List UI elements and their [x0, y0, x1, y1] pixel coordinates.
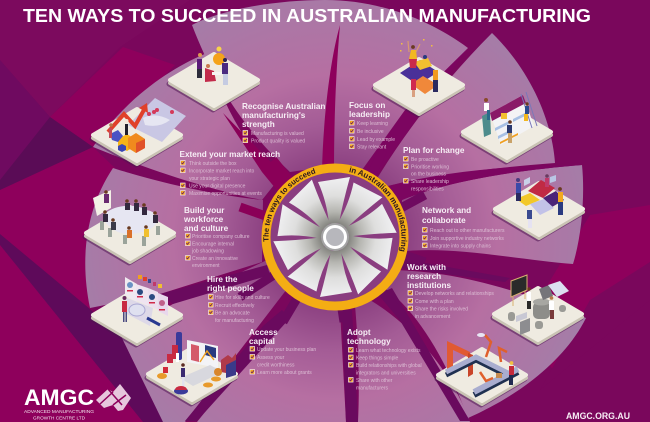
panel: plan illustration [462, 92, 551, 162]
central turbine with ring: in Australian manufacturing [349, 166, 408, 252]
text: recognise: Product quality is valued [251, 138, 305, 144]
panel: network illustration [494, 174, 583, 239]
text: work with research: research [407, 272, 441, 281]
text: focus: leadership [349, 110, 390, 119]
text: work with research: institutions [407, 281, 452, 290]
text: adopt: Adopt [347, 328, 371, 337]
text: plan: Be proactive [411, 157, 439, 163]
text: build: environment [192, 263, 220, 269]
text: work with research: Work with [407, 263, 446, 272]
text: focus: Stay relevant [357, 144, 387, 150]
panel: access illustration [147, 332, 236, 404]
text: network: collaborate [422, 216, 466, 225]
text: adopt [347, 328, 422, 391]
text: plan: Share leadership [411, 179, 449, 185]
text: build: job shadowing [191, 248, 224, 254]
panel: adopt illustration [437, 333, 526, 405]
text: plan: Plan for change [403, 146, 465, 155]
panel: hire illustration [92, 275, 181, 345]
text: work with research: in advancement [415, 314, 451, 320]
logo: AMGC: GROWTH CENTRE LTD [33, 416, 86, 420]
central turbine with ring [262, 164, 408, 310]
text: access: Access [249, 328, 278, 337]
text: work with research [407, 263, 494, 320]
text: network: Join supportive industry networks [430, 236, 504, 242]
text: plan: Prioritise working [411, 164, 449, 170]
text: work with research: Share the risks involved [415, 306, 468, 312]
text: build: Prioritise company culture [192, 234, 250, 240]
text: extend: Think outside the box [189, 161, 237, 167]
text: focus: Lead by example [357, 137, 395, 143]
text: access: credit worthiness [257, 362, 295, 368]
text: adopt: Keep things simple [356, 355, 398, 361]
panel: recognise illustration [169, 46, 258, 110]
text: build: Build your [184, 206, 225, 215]
logo: AMGC: AMGC [24, 385, 94, 410]
text: plan [403, 146, 465, 192]
text: extend: Extend your market reach [180, 150, 280, 159]
text: focus: Keep learning [357, 121, 388, 127]
logo: AMGC: ADVANCED MANUFACTURING [24, 409, 94, 414]
text: extend: Maximise opportunities at events [189, 191, 262, 197]
text: focus [349, 101, 395, 150]
text: work with research: Develop networks and relationships [415, 291, 494, 297]
text: adopt: Share with other [356, 378, 393, 384]
central turbine with ring: The ten ways to succeed [263, 168, 316, 242]
text: extend: Use your digital presence [189, 183, 246, 189]
text: network: Integrate into supply chains [430, 243, 491, 249]
website url: AMGC.ORG.AU [566, 411, 630, 421]
text: adopt: manufacturers [356, 385, 388, 391]
text: focus: Be inclusive [357, 129, 384, 135]
dark spokes [160, 25, 582, 422]
text: extend [180, 150, 280, 197]
title: TEN WAYS TO SUCCEED IN AUSTRALIAN MANUFACTURING [23, 5, 591, 26]
text: hire: Recruit effectively [215, 303, 255, 309]
logo: AMGC [24, 384, 131, 420]
text: hire [207, 275, 270, 324]
text: hire: right people [207, 284, 254, 293]
text: work with research: Come with a plan [415, 299, 454, 305]
text: focus: Focus on [349, 101, 385, 110]
text: extend: Incorporate market reach into [189, 168, 255, 174]
text: build: Create an innovative [192, 256, 238, 262]
text: access: capital [249, 337, 275, 346]
text: build: workforce [183, 215, 224, 224]
text: build: and culture [184, 224, 229, 233]
panel: extend illustration [92, 98, 186, 165]
panel: research illustration [493, 275, 582, 344]
panel: focus illustration [374, 39, 463, 115]
text: extend: your strategic plan [189, 176, 230, 182]
text: access: Assess your [257, 355, 285, 361]
text: hire: Hire the [207, 275, 238, 284]
text: recognise: Recognise Australian [242, 102, 325, 111]
text: recognise: Manufacturing is valued [251, 131, 304, 137]
text: plan: on the business [411, 171, 447, 177]
text: recognise: strength [242, 120, 275, 129]
text: adopt: Build relationships with global [356, 363, 422, 369]
text: network: Network and [422, 206, 471, 215]
text: build [183, 206, 250, 269]
text: hire: Be an advocate [215, 310, 250, 316]
text: hire: Hire for skills and culture [215, 295, 270, 301]
text: build: Encourage internal [192, 241, 234, 247]
text: access [249, 328, 316, 376]
text: plan: responsibilities [411, 186, 444, 192]
text: access: Update your business plan [257, 347, 316, 353]
text: network: Reach out to other manufacturers [430, 228, 505, 234]
text: adopt: Learn what technology exists [356, 348, 421, 354]
text: recognise: manufacturing's [242, 111, 306, 120]
text: adopt: integrators and universities [356, 370, 416, 376]
radial petals [85, 0, 586, 422]
text: hire: for manufacturing [215, 318, 254, 324]
text: access: Learn more about grants [257, 370, 312, 376]
text: recognise [242, 102, 325, 144]
text: adopt: technology [347, 337, 391, 346]
text: network [422, 206, 505, 249]
panel: build illustration [85, 190, 174, 263]
